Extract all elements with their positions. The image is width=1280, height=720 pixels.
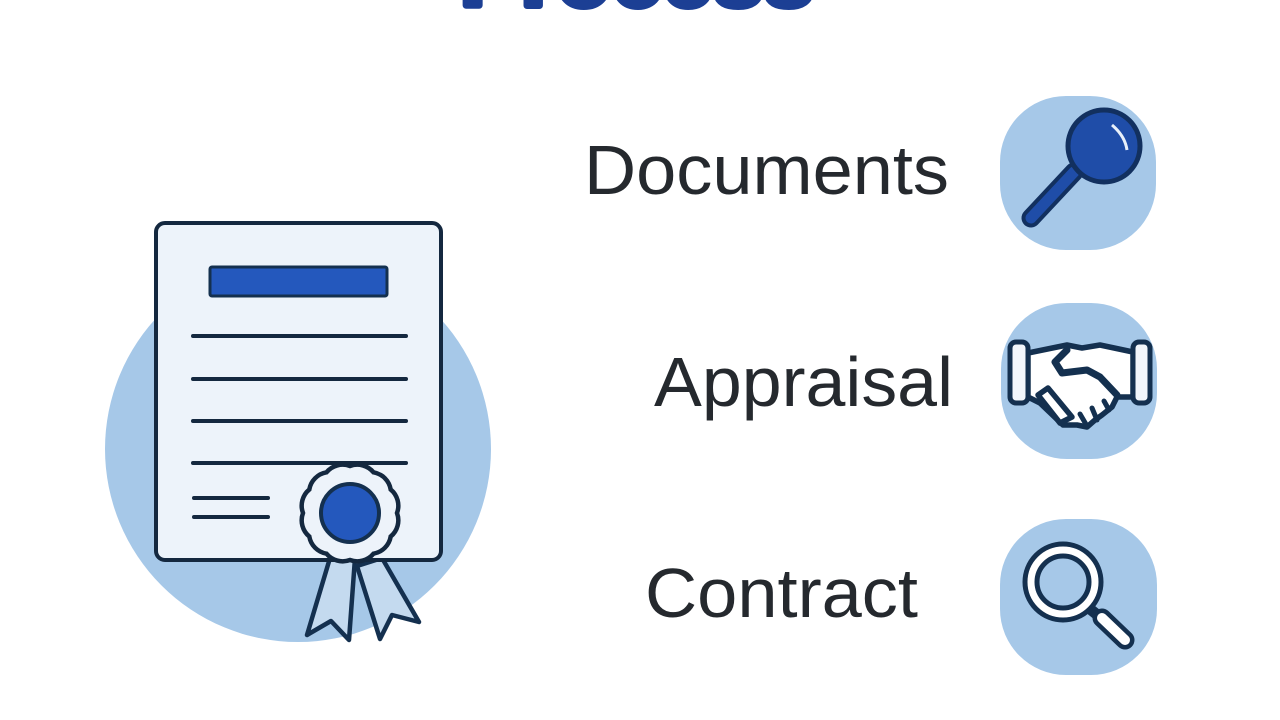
icon: outline magnifier — [1000, 519, 1157, 675]
illustration: certificate document — [105, 223, 491, 642]
label: Contract: Contract — [645, 554, 918, 632]
label: Appraisal: Appraisal — [654, 343, 953, 421]
seal rosette — [302, 465, 398, 561]
document heading bar — [210, 267, 387, 296]
background circle — [105, 256, 491, 642]
icon: blue magnifier — [1000, 96, 1156, 250]
ribbon: left tail — [307, 558, 355, 640]
seal centre — [321, 484, 379, 542]
ribbon: right tail — [357, 558, 419, 639]
label: Documents: Documents — [584, 131, 949, 209]
document text lines — [193, 336, 406, 517]
icon: handshake — [1001, 303, 1157, 459]
document page — [156, 223, 441, 560]
